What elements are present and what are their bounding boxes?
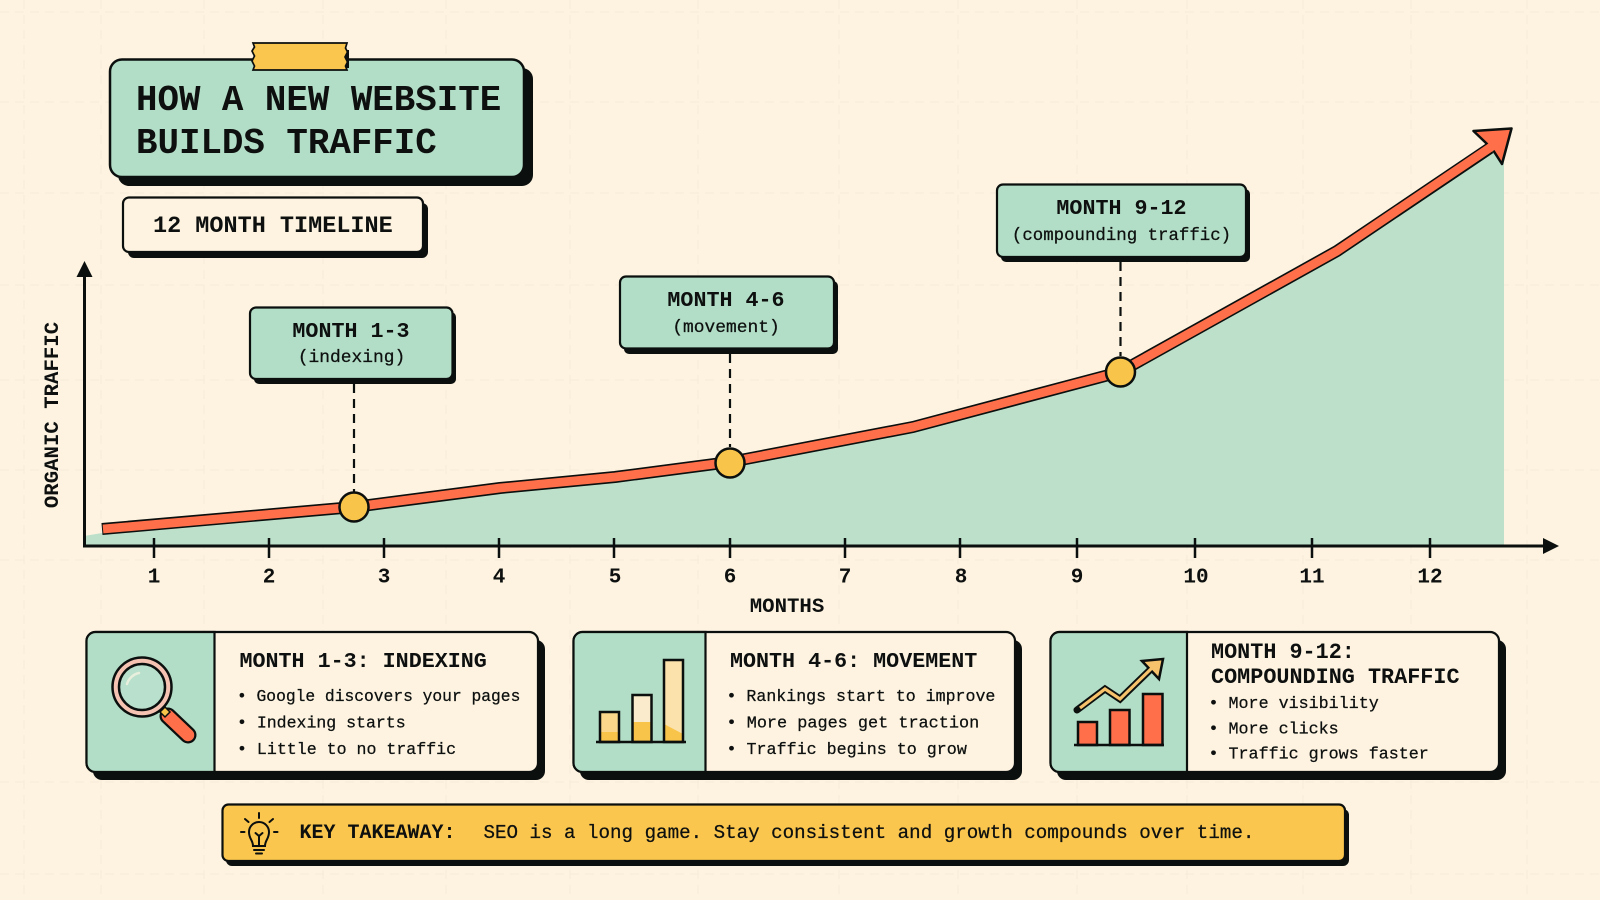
subtitle badge: 12 MONTH TIMELINE: [153, 213, 393, 240]
icon: growth chart: [1074, 659, 1164, 745]
month numbers: 2: [263, 566, 275, 590]
heading: COMPOUNDING TRAFFIC: [1211, 665, 1460, 690]
milestone dots: [340, 358, 1135, 522]
subtitle badge: [123, 198, 428, 258]
callout: month 4-6: MONTH 4-6: [667, 288, 785, 313]
takeaway text: SEO is a long game. Stay consistent and growth compounds over time.: [484, 822, 1254, 844]
callout: month 1-3: MONTH 1-3: [292, 319, 410, 344]
panel: month 9-12 compounding traffic: [1050, 632, 1506, 780]
month numbers: 8: [955, 566, 967, 590]
month numbers: 5: [609, 566, 621, 590]
month numbers: [148, 566, 1443, 590]
bullet list: • More clicks: [1208, 720, 1339, 740]
bullet list: • More pages get traction: [726, 714, 979, 734]
heading: MONTH 1-3: INDEXING: [240, 649, 487, 674]
bullet list: • Traffic grows faster: [1208, 746, 1429, 764]
month numbers: 11: [1299, 566, 1325, 590]
title panel: [110, 43, 533, 186]
area fill: [84, 148, 1504, 546]
panel: month 4-6 movement: [574, 632, 1022, 780]
y axis: [76, 261, 92, 546]
month numbers: 3: [378, 566, 390, 590]
icon: rising bars: [596, 660, 686, 742]
month numbers: 4: [493, 566, 505, 590]
y axis label: ORGANIC TRAFFIC: [42, 322, 65, 508]
area chart: [42, 128, 1559, 619]
bullet list: • Indexing starts: [237, 714, 406, 732]
month numbers: 10: [1183, 566, 1209, 590]
bullet list: [726, 687, 995, 760]
month numbers: 9: [1071, 566, 1083, 590]
x axis ticks: [154, 538, 1430, 558]
tape: [252, 43, 349, 70]
title text: HOW A NEW WEBSITE: [136, 80, 501, 121]
icon: magnifying glass: [112, 658, 188, 735]
bullet list: [237, 687, 520, 759]
title text: BUILDS TRAFFIC: [136, 123, 437, 164]
icon: light bulb: [241, 813, 278, 854]
takeaway label: KEY TAKEAWAY:: [300, 822, 456, 845]
bullet list: • Little to no traffic: [237, 740, 456, 759]
dashed connectors: [354, 262, 1120, 492]
heading: MONTH 9-12:: [1211, 640, 1355, 665]
callout: month 1-3: (indexing): [298, 348, 405, 368]
callout: month 4-6: (movement): [672, 318, 780, 338]
x axis: [83, 538, 1559, 554]
callout: month 9-12: (compounding traffic): [1012, 227, 1231, 246]
growth line with arrow: [102, 128, 1512, 529]
month numbers: 6: [724, 566, 736, 590]
bullet list: • Rankings start to improve: [726, 687, 995, 706]
callout: month 9-12: [997, 184, 1250, 262]
month numbers: 12: [1417, 566, 1443, 590]
callout: month 1-3: [250, 308, 456, 384]
panel: month 1-3 indexing: [86, 632, 545, 780]
bullet list: • More visibility: [1208, 695, 1379, 714]
month numbers: 7: [839, 566, 851, 590]
month numbers: 1: [148, 566, 160, 590]
bullet list: [1208, 695, 1429, 764]
callout: month 4-6: [620, 276, 838, 354]
bullet list: • Traffic begins to grow: [726, 741, 967, 760]
bullet list: • Google discovers your pages: [237, 687, 520, 706]
key takeaway bar: [222, 804, 1349, 866]
x axis label: MONTHS: [750, 596, 824, 619]
heading: MONTH 4-6: MOVEMENT: [730, 649, 977, 674]
callout: month 9-12: MONTH 9-12: [1056, 196, 1187, 221]
